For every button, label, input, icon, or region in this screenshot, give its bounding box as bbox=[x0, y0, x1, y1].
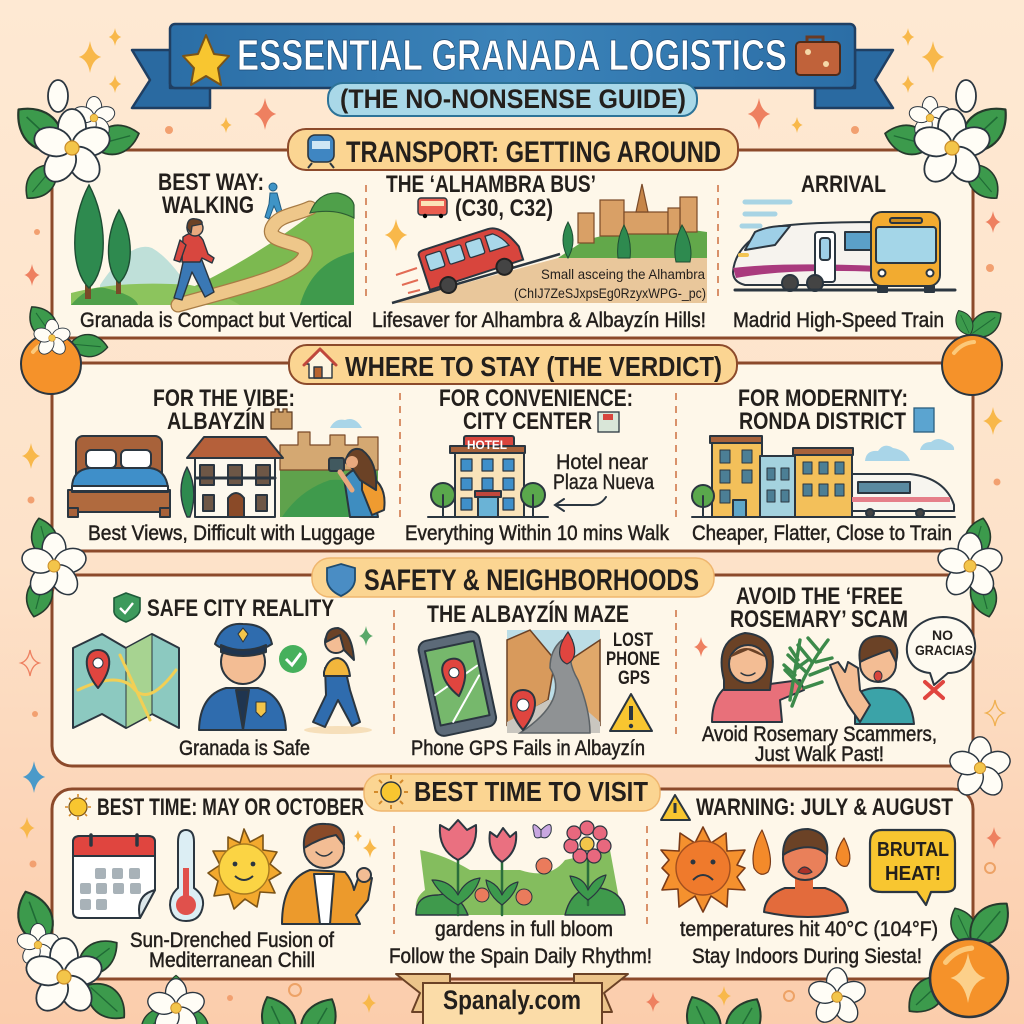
heading: AVOID THE ‘FREE bbox=[736, 583, 903, 610]
bottom flower left centre bbox=[134, 975, 216, 1024]
icon: sun bbox=[374, 775, 408, 809]
walking person bbox=[174, 219, 214, 300]
footer ribbon bbox=[396, 974, 628, 1024]
icon: sparkles bbox=[354, 830, 377, 858]
illustration: bed bbox=[68, 436, 170, 517]
ribbon tails bbox=[132, 50, 893, 108]
red bus bbox=[418, 222, 526, 299]
caption: scam: Avoid Rosemary Scammers, bbox=[702, 723, 937, 746]
heading text: SAFETY & NEIGHBORHOODS bbox=[364, 564, 699, 597]
caption 2: Stay Indoors During Siesta! bbox=[692, 945, 922, 968]
title banner bbox=[132, 24, 893, 108]
label: lost: LOST bbox=[613, 630, 653, 651]
icon: map pin bbox=[511, 690, 535, 730]
illustration: police officer bbox=[199, 624, 286, 730]
subtitle pill bbox=[328, 83, 697, 116]
captions: safety: Granada is Safe bbox=[179, 737, 310, 760]
illustration: rosemary sprig bbox=[784, 638, 832, 706]
heading line 2: CITY CENTER bbox=[463, 408, 592, 435]
subtitle text: (THE NO-NONSENSE GUIDE) bbox=[340, 84, 686, 114]
caption: bus: Lifesaver for Alhambra & Albayzín Hills! bbox=[372, 309, 706, 332]
captions: stay bbox=[88, 522, 952, 545]
stay divider 2 bbox=[675, 393, 677, 517]
captions: may or october bbox=[130, 929, 334, 972]
ribbon tails bbox=[396, 974, 628, 1012]
heading line 2: WALKING bbox=[162, 192, 254, 219]
plaque bbox=[423, 983, 602, 1024]
site name: Spanaly.com bbox=[443, 985, 581, 1015]
heading: FOR MODERNITY: bbox=[738, 385, 908, 412]
panel: safety background bbox=[52, 575, 973, 766]
caption: gps: Phone GPS Fails in Albayzín bbox=[411, 737, 645, 760]
illustration: thermometer bbox=[170, 830, 203, 921]
icon: tower bbox=[271, 409, 292, 429]
hotel label: HOTEL bbox=[467, 438, 507, 452]
illustration: man bbox=[830, 636, 914, 724]
icon: sparkle bbox=[385, 219, 407, 251]
transport divider 2 bbox=[717, 185, 719, 302]
captions: transport: Granada is Compact but Vertical bbox=[80, 309, 352, 332]
orange left bbox=[21, 300, 109, 394]
best time column: warning bbox=[661, 794, 955, 968]
icon: warning bbox=[661, 795, 690, 820]
icon: suitcase bbox=[796, 37, 840, 75]
caption: ronda: Cheaper, Flatter, Close to Train bbox=[692, 522, 952, 545]
best time divider 2 bbox=[646, 826, 648, 930]
hill bbox=[558, 222, 707, 258]
section heading: where to stay bbox=[289, 345, 737, 384]
icon: small building bbox=[598, 412, 619, 432]
cypress bbox=[563, 222, 691, 262]
corner decor: top right flowers bbox=[881, 80, 1017, 206]
panel: transport background bbox=[52, 150, 973, 338]
speed marks bbox=[396, 268, 420, 293]
caption: scam line 2: Just Walk Past! bbox=[755, 743, 884, 766]
heading: BEST WAY: bbox=[158, 169, 264, 196]
high-speed train bbox=[733, 222, 880, 291]
illustration: flames bbox=[753, 830, 850, 874]
best time column: may or october bbox=[65, 794, 377, 924]
bottom leaves right bbox=[678, 990, 771, 1024]
heading line 2: ALBAYZÍN bbox=[167, 407, 265, 435]
captions: transport bbox=[80, 309, 944, 332]
bottom flower right centre bbox=[806, 968, 868, 1024]
section heading: safety bbox=[312, 558, 714, 597]
heading: WARNING: JULY & AUGUST bbox=[696, 794, 953, 821]
flower right middle bbox=[935, 515, 1005, 620]
icon: small sun bbox=[65, 794, 91, 820]
safety column: rosemary scam bbox=[694, 583, 975, 724]
illustration: happy man bbox=[282, 824, 372, 924]
icon: star bbox=[183, 35, 229, 85]
illustration: woman with rosemary bbox=[712, 633, 804, 722]
caption: centre: Everything Within 10 mins Walk bbox=[405, 522, 669, 545]
best time column: gardens bbox=[389, 820, 652, 968]
captions: safety bbox=[179, 723, 937, 766]
stay column: albayzin bbox=[68, 385, 385, 517]
banner body bbox=[170, 24, 855, 88]
speech bubble: brutal heat bbox=[870, 830, 955, 905]
corner decor: top left flowers bbox=[7, 80, 143, 206]
icon: house bbox=[304, 349, 336, 378]
small caption: Small asceing the Alhambra bbox=[541, 266, 705, 282]
safety column: safe city bbox=[73, 593, 373, 734]
caption: temperatures hit 40°C (104°F) bbox=[680, 918, 938, 941]
transport column: alhambra bus bbox=[385, 171, 707, 303]
orange bottom right bbox=[900, 894, 1019, 1022]
arrow bbox=[555, 497, 606, 511]
caption line 2: Mediterranean Chill bbox=[149, 949, 315, 972]
illustration: white house bbox=[181, 432, 378, 517]
heading: BEST TIME: MAY OR OCTOBER bbox=[97, 794, 364, 821]
stay divider 1 bbox=[399, 393, 401, 517]
panel: best time background bbox=[52, 789, 973, 979]
heading: FOR THE VIBE: bbox=[153, 385, 295, 412]
illustration: calendar bbox=[73, 835, 155, 918]
illustration: hotel bbox=[428, 436, 548, 517]
illustration: cloud bbox=[330, 419, 362, 428]
bubble text brutal: BRUTAL bbox=[877, 839, 949, 861]
stay column: city centre bbox=[428, 385, 654, 517]
icon: butterfly bbox=[533, 824, 551, 838]
orange right bbox=[942, 304, 1007, 395]
caption: gardens in full bloom bbox=[435, 918, 613, 941]
label: phone: PHONE bbox=[606, 649, 660, 670]
safety column: maze bbox=[417, 600, 660, 738]
icon: sparkle bbox=[694, 637, 708, 657]
heading text: TRANSPORT: GETTING AROUND bbox=[346, 136, 721, 169]
note text line 2: Plaza Nueva bbox=[553, 471, 654, 494]
note text: Hotel near bbox=[556, 451, 648, 474]
illustration: clouds bbox=[865, 439, 954, 461]
label: gps: GPS bbox=[618, 668, 650, 689]
illustration: smiling sun bbox=[208, 829, 281, 909]
bubble text gracias: GRACIAS bbox=[915, 642, 973, 658]
illustration: bus on hill bbox=[392, 184, 707, 303]
illustration: map bbox=[73, 634, 179, 728]
illustration: angry sun bbox=[661, 827, 745, 912]
bottom left flowers bbox=[10, 886, 134, 1024]
flower left middle bbox=[19, 515, 89, 620]
cypress trees bbox=[75, 185, 130, 299]
captions: may or october: Sun-Drenched Fusion of bbox=[130, 929, 334, 952]
bubble text heat: HEAT! bbox=[885, 863, 941, 885]
heading: ARRIVAL bbox=[801, 171, 886, 198]
icon: red x bbox=[925, 682, 943, 698]
yellow bus bbox=[735, 212, 955, 292]
illustration: hill scene bbox=[71, 185, 354, 305]
icon: train bbox=[308, 135, 334, 168]
heading text: WHERE TO STAY (THE VERDICT) bbox=[345, 351, 722, 382]
speed clouds bbox=[742, 202, 790, 226]
alhambra castle bbox=[578, 184, 697, 243]
illustration: alley bbox=[507, 630, 600, 733]
transport column: walking bbox=[71, 169, 354, 305]
icon: small bus bbox=[418, 198, 447, 218]
heading: THE ALBAYZÍN MAZE bbox=[427, 600, 629, 628]
illustration: walking woman bbox=[304, 628, 372, 734]
heading line 2: RONDA DISTRICT bbox=[739, 408, 906, 435]
bottom leaves left bbox=[253, 990, 346, 1024]
captions: stay: Best Views, Difficult with Luggage bbox=[88, 522, 375, 545]
icon: green shield bbox=[114, 593, 140, 622]
caption: train: Madrid High-Speed Train bbox=[733, 309, 944, 332]
heading line 2: (C30, C32) bbox=[455, 195, 553, 222]
icon: tower block bbox=[914, 408, 934, 432]
speech bubble: no gracias bbox=[907, 617, 975, 685]
transport divider 1 bbox=[365, 185, 367, 302]
icon: shield bbox=[327, 564, 355, 596]
bubble text no: NO bbox=[932, 627, 953, 643]
illustration: garden bbox=[416, 820, 625, 915]
safety divider 2 bbox=[675, 610, 677, 734]
icon: sparkle bbox=[359, 626, 373, 646]
icon: check badge bbox=[279, 645, 307, 673]
section heading: best time bbox=[364, 774, 660, 811]
heading: THE ‘ALHAMBRA BUS’ bbox=[386, 171, 596, 198]
illustration: phone bbox=[417, 630, 498, 738]
heading: SAFE CITY REALITY bbox=[147, 595, 334, 622]
safety divider 1 bbox=[393, 610, 395, 734]
heading line 2: ROSEMARY’ SCAM bbox=[730, 606, 908, 633]
panel: where to stay background bbox=[52, 363, 973, 551]
place id: (ChIJ7ZeSJxpsEg0RzyxWPG-_pc) bbox=[514, 285, 706, 301]
heading text: BEST TIME TO VISIT bbox=[414, 776, 648, 807]
heading: FOR CONVENIENCE: bbox=[439, 385, 633, 412]
flower right lower bbox=[947, 737, 1013, 800]
section heading: transport bbox=[288, 129, 738, 170]
illustration: photographer bbox=[329, 449, 385, 517]
stay column: ronda bbox=[692, 385, 955, 517]
transport column: arrival bbox=[733, 171, 955, 292]
ring decor bbox=[289, 863, 995, 1001]
illustration: buildings bbox=[692, 436, 955, 517]
icon: small walker bbox=[265, 183, 284, 219]
caption 2: Follow the Spain Daily Rhythm! bbox=[389, 945, 652, 968]
title text: ESSENTIAL GRANADA LOGISTICS bbox=[237, 31, 787, 80]
best time divider 1 bbox=[393, 826, 395, 934]
illustration: sweating man bbox=[764, 829, 848, 917]
icon: warning bbox=[610, 694, 652, 731]
